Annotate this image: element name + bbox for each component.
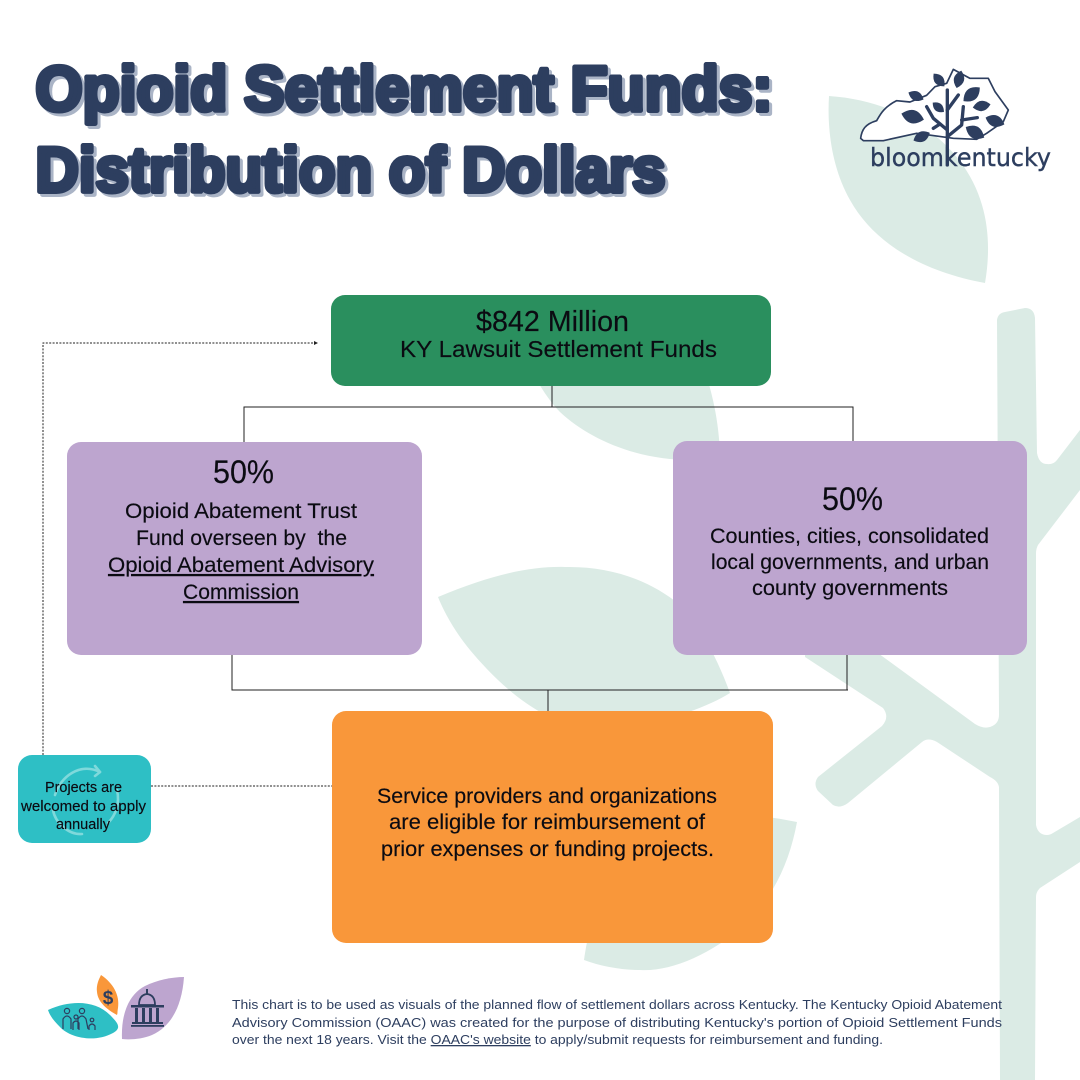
arrow: dotted loop from annual applications back to funds [43,341,318,755]
logo: bloomkentucky [861,69,1051,172]
icon: capitol building on purple leaf [122,977,184,1039]
description: Fund overseen by the [136,527,347,550]
panel: annual applications [18,755,151,843]
title: Opioid Settlement Funds: [36,54,772,124]
description: Opioid Abatement Trust [125,500,357,523]
icon: family on teal leaf [48,1003,118,1038]
panel: local governments share [673,441,1027,655]
description [108,500,375,604]
percentage: 50% [822,481,883,517]
description: prior expenses or funding projects. [381,838,714,861]
amount: $842 Million [476,306,629,338]
icon: cycle arrows [53,766,118,834]
footnote [232,997,1003,1047]
leaf: lower [584,815,797,970]
description [710,525,989,600]
description: welcomed to apply [20,799,147,815]
description: KY Lawsuit Settlement Funds [400,336,717,362]
panel: opioid abatement trust fund share [67,442,422,655]
title: Opioid Settlement Funds: [38,58,776,128]
title [36,54,776,208]
percentage: 50% [213,454,274,490]
leaf: top right [829,96,988,283]
title: Distribution of Dollars [36,136,666,206]
icon: dollar on orange leaf: $ [103,988,114,1009]
icons: footer leaves [48,975,184,1039]
footnote: over the next 18 years. Visit the OAAC's website to apply/submit requests for reimbursement and funding. [232,1032,883,1047]
description: annually [56,817,111,833]
logo tree and state outline [861,69,1008,165]
description: Commission [183,581,299,604]
description: county governments [752,577,948,600]
description: are eligible for reimbursement of [389,811,705,834]
panel: service providers [332,711,773,943]
description: local governments, and urban [711,551,989,574]
description: Projects are [45,780,122,796]
connector: dotted line from annual applications to service providers [151,785,332,787]
tree trunk and branches [805,308,1080,1080]
background: decorative tree and leaves [438,96,1080,1080]
description: Opioid Abatement Advisory [108,554,375,577]
leaf: middle [438,567,730,728]
footnote: Advisory Commission (OAAC) was created for the purpose of distributing Kentucky's portion of Opioid Settlement Funds [232,1015,1003,1030]
description: Service providers and organizations [377,785,717,808]
title: Distribution of Dollars [38,138,668,208]
panel: settlement total [331,295,771,386]
connector: both 50% shares to service providers [232,655,848,711]
leaf: behind green box [530,370,720,460]
description [20,780,147,833]
connector: settlement funds to both 50% shares [244,386,853,442]
description [377,785,717,861]
description: Counties, cities, consolidated [710,525,989,548]
footnote: This chart is to be used as visuals of the planned flow of settlement dollars across Kentucky. The Kentucky Opioid Abatement [232,997,1002,1012]
logo wordmark: bloomkentucky [870,143,1051,172]
